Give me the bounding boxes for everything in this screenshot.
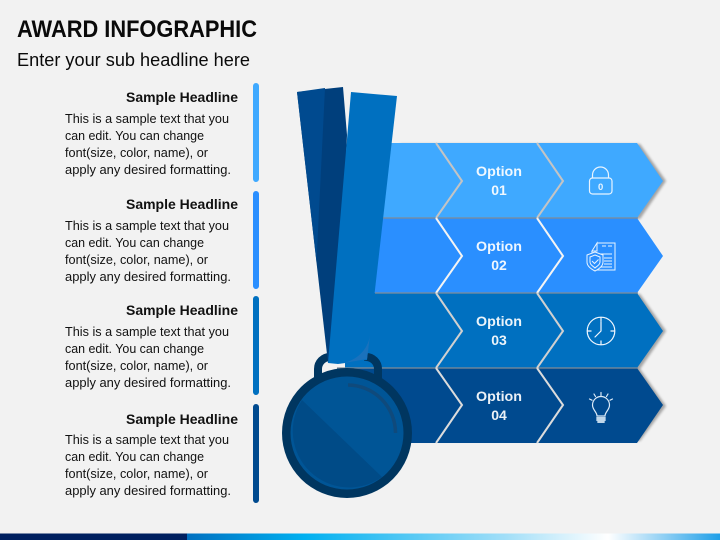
option 4 label: Option — [476, 388, 522, 404]
ribbon fold — [338, 335, 370, 364]
option 3 label: 03 — [491, 332, 507, 348]
ribbon front — [328, 92, 397, 364]
icon: document with shield — [587, 243, 615, 271]
medal ring loop — [318, 357, 378, 382]
footer bar — [0, 534, 720, 540]
text block 4: can edit. You can change — [65, 449, 204, 464]
arrow row shadows — [400, 144, 666, 441]
text block 3: font(size, color, name), or — [65, 358, 209, 373]
icon: lock — [590, 167, 612, 194]
ribbon back — [297, 87, 347, 363]
text block 2: This is a sample text that you — [65, 218, 229, 233]
icon: clock — [587, 317, 615, 345]
medal — [282, 368, 412, 498]
option 4 label — [476, 388, 522, 423]
text block 2 — [65, 196, 238, 284]
text block 1 — [65, 89, 238, 177]
text block 1: This is a sample text that you — [65, 111, 229, 126]
icon: light bulb — [590, 392, 612, 422]
text block 4: apply any desired formatting. — [65, 483, 231, 498]
row 3 arrow — [345, 293, 663, 368]
text block 3: This is a sample text that you — [65, 324, 229, 339]
chevron dividers — [436, 143, 563, 443]
option 1 label — [476, 163, 522, 198]
text block 4: This is a sample text that you — [65, 432, 229, 447]
title: AWARD INFOGRAPHIC — [17, 16, 257, 43]
option 3 label — [476, 313, 522, 348]
text block 1: can edit. You can change — [65, 128, 204, 143]
option 1 label: 01 — [491, 182, 507, 198]
text block 4 — [65, 411, 238, 498]
accent bar 1 — [253, 83, 259, 182]
option 3 label: Option — [476, 313, 522, 329]
text block 2: Sample Headline — [126, 196, 238, 212]
text block 2: can edit. You can change — [65, 235, 204, 250]
row 4 arrow — [337, 368, 663, 443]
icon: lock: 0 — [598, 182, 603, 193]
accent bar 2 — [253, 191, 259, 289]
option 2 label: 02 — [491, 257, 507, 273]
text block 4: Sample Headline — [126, 411, 238, 427]
text block 3: Sample Headline — [126, 302, 238, 318]
text block 3 — [65, 302, 238, 390]
row 2 arrow — [360, 218, 663, 293]
option 2 label: Option — [476, 238, 522, 254]
subtitle: Enter your sub headline here — [17, 50, 250, 70]
accent bar 4 — [253, 404, 259, 503]
medal highlight — [348, 385, 396, 433]
text block 1: Sample Headline — [126, 89, 238, 105]
text block 1: font(size, color, name), or — [65, 145, 209, 160]
text block 2: apply any desired formatting. — [65, 269, 231, 284]
text block 3: can edit. You can change — [65, 341, 204, 356]
text block 3: apply any desired formatting. — [65, 375, 231, 390]
text block 1: apply any desired formatting. — [65, 162, 231, 177]
text block 2: font(size, color, name), or — [65, 252, 209, 267]
text block 4: font(size, color, name), or — [65, 466, 209, 481]
option 2 label — [476, 238, 522, 273]
row separator lines — [337, 218, 638, 368]
accent bar 3 — [253, 296, 259, 395]
medal lower shade — [293, 400, 382, 487]
option 1 label: Option — [476, 163, 522, 179]
option 4 label: 04 — [491, 407, 507, 423]
row 1 arrow — [370, 143, 663, 218]
